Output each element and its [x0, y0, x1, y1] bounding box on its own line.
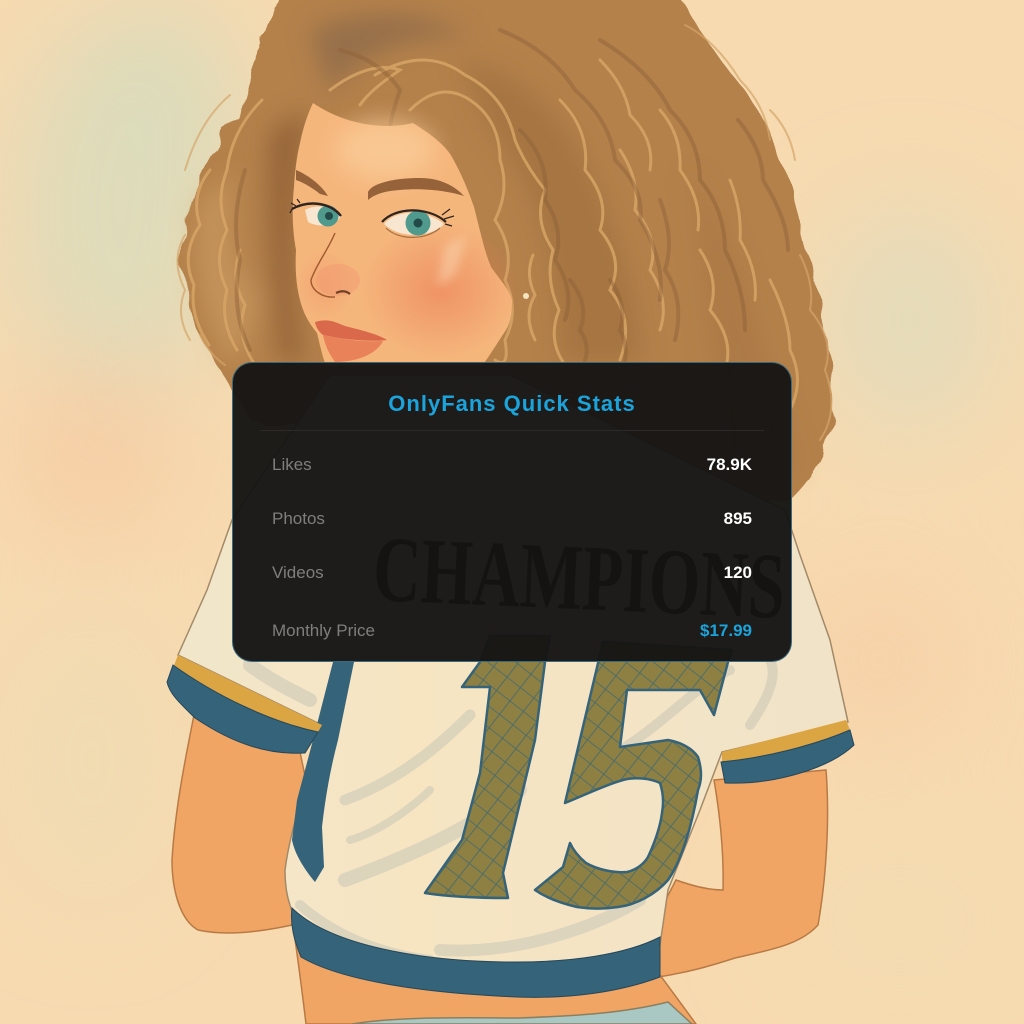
jersey: [167, 375, 854, 997]
row: likes: 78.9K: [707, 455, 752, 474]
row: videos: [272, 563, 752, 582]
row: photos: 895: [724, 509, 752, 528]
jersey wordmark: CHAMPIONS: [371, 517, 787, 639]
midriff: [293, 925, 696, 1024]
left sleeve cuff: [167, 655, 322, 753]
row: videos: Videos: [272, 563, 324, 582]
face: [293, 103, 520, 366]
row: monthly price: [272, 621, 752, 640]
left arm: [172, 715, 310, 933]
right arm behind back: [650, 770, 828, 977]
row: monthly price: $17.99: [700, 621, 752, 640]
navy side panel: [292, 662, 354, 882]
row: photos: Photos: [272, 509, 325, 528]
panel: quick stats card: [232, 362, 792, 662]
right sleeve cuff: [721, 720, 854, 783]
row: photos: [272, 509, 752, 528]
hair: back mass: [180, 0, 833, 500]
row: likes: Likes: [272, 455, 312, 474]
jersey number 15: [425, 636, 732, 908]
row: videos: 120: [724, 563, 752, 582]
bottom hem band: [291, 908, 660, 997]
lips: [315, 320, 387, 362]
hair: curl strands: [178, 25, 831, 440]
eyes: [290, 199, 454, 237]
nose: [311, 233, 360, 297]
row: monthly price: Monthly Price: [272, 621, 375, 640]
row: likes: [272, 455, 752, 474]
denim waistband: [352, 1002, 692, 1024]
jersey fold shadows: [250, 660, 773, 960]
heading: OnlyFans Quick Stats: [388, 391, 636, 416]
earring: [523, 293, 529, 299]
eyebrows: [296, 170, 464, 200]
